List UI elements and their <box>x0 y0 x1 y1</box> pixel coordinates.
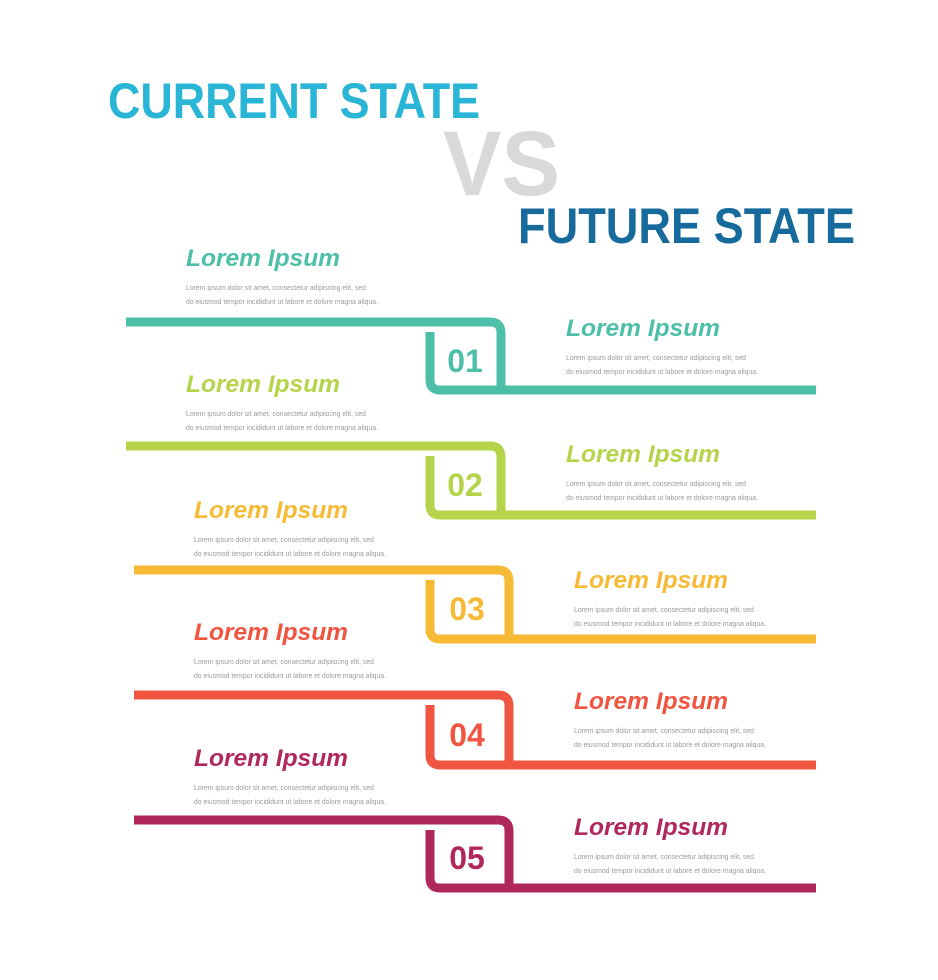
right text 4: Lorem Ipsum <box>574 688 728 715</box>
left text 2 <box>186 371 378 432</box>
number 05: 05 <box>449 840 485 876</box>
row 3 <box>134 497 816 639</box>
left text 1: Lorem ipsum dolor sit amet, consectetur adipiscing elit, sed <box>186 283 366 292</box>
title: future state: FUTURE STATE <box>518 198 855 254</box>
right text 2 <box>566 441 758 502</box>
right text 2: Lorem ipsum dolor sit amet, consectetur adipiscing elit, sed <box>566 479 746 488</box>
connector 2 <box>126 446 816 515</box>
right text 1 <box>566 315 758 376</box>
row 1 <box>126 245 816 390</box>
left text 5 <box>194 745 386 806</box>
connector 5 <box>134 820 816 888</box>
left text 4: Lorem ipsum dolor sit amet, consectetur adipiscing elit, sed <box>194 657 374 666</box>
right text 5: Lorem Ipsum <box>574 814 728 841</box>
right text 5: Lorem ipsum dolor sit amet, consectetur adipiscing elit, sed <box>574 852 754 861</box>
left text 2: Lorem Ipsum <box>186 371 340 398</box>
number 01: 01 <box>447 343 483 379</box>
right text 3: Lorem Ipsum <box>574 567 728 594</box>
left text 3: Lorem Ipsum <box>194 497 348 524</box>
connector 1 <box>126 322 816 390</box>
right text 5: do eiusmod tempor incididunt ut labore et dolore magna aliqua. <box>574 866 766 875</box>
left text 2: do eiusmod tempor incididunt ut labore et dolore magna aliqua. <box>186 423 378 432</box>
right text 2: do eiusmod tempor incididunt ut labore et dolore magna aliqua. <box>566 493 758 502</box>
left text 5: do eiusmod tempor incididunt ut labore et dolore magna aliqua. <box>194 797 386 806</box>
left text 2: Lorem ipsum dolor sit amet, consectetur adipiscing elit, sed <box>186 409 366 418</box>
right text 1: do eiusmod tempor incididunt ut labore et dolore magna aliqua. <box>566 367 758 376</box>
right text 1: Lorem ipsum dolor sit amet, consectetur adipiscing elit, sed <box>566 353 746 362</box>
right text 2: Lorem Ipsum <box>566 441 720 468</box>
connector 4 <box>134 695 816 765</box>
right text 5 <box>574 814 766 875</box>
left text 1: do eiusmod tempor incididunt ut labore et dolore magna aliqua. <box>186 297 378 306</box>
connector 3 <box>134 570 816 639</box>
row 2 <box>126 371 816 515</box>
row 4 <box>134 619 816 765</box>
left text 5: Lorem ipsum dolor sit amet, consectetur adipiscing elit, sed <box>194 783 374 792</box>
left text 1 <box>186 245 378 306</box>
left text 5: Lorem Ipsum <box>194 745 348 772</box>
number 03: 03 <box>449 591 485 627</box>
left text 3: do eiusmod tempor incididunt ut labore et dolore magna aliqua. <box>194 549 386 558</box>
right text 3: Lorem ipsum dolor sit amet, consectetur adipiscing elit, sed <box>574 605 754 614</box>
right text 3: do eiusmod tempor incididunt ut labore et dolore magna aliqua. <box>574 619 766 628</box>
right text 4: do eiusmod tempor incididunt ut labore et dolore magna aliqua. <box>574 740 766 749</box>
left text 3: Lorem ipsum dolor sit amet, consectetur adipiscing elit, sed <box>194 535 374 544</box>
right text 3 <box>574 567 766 628</box>
left text 4 <box>194 619 386 680</box>
left text 4: Lorem Ipsum <box>194 619 348 646</box>
title: vs: VS <box>443 113 560 215</box>
right text 4 <box>574 688 766 749</box>
right text 4: Lorem ipsum dolor sit amet, consectetur adipiscing elit, sed <box>574 726 754 735</box>
row 5 <box>134 745 816 888</box>
number 02: 02 <box>447 467 483 503</box>
left text 4: do eiusmod tempor incididunt ut labore et dolore magna aliqua. <box>194 671 386 680</box>
left text 3 <box>194 497 386 558</box>
number 04: 04 <box>449 717 485 753</box>
right text 1: Lorem Ipsum <box>566 315 720 342</box>
title: current state: CURRENT STATE <box>108 73 480 129</box>
left text 1: Lorem Ipsum <box>186 245 340 272</box>
